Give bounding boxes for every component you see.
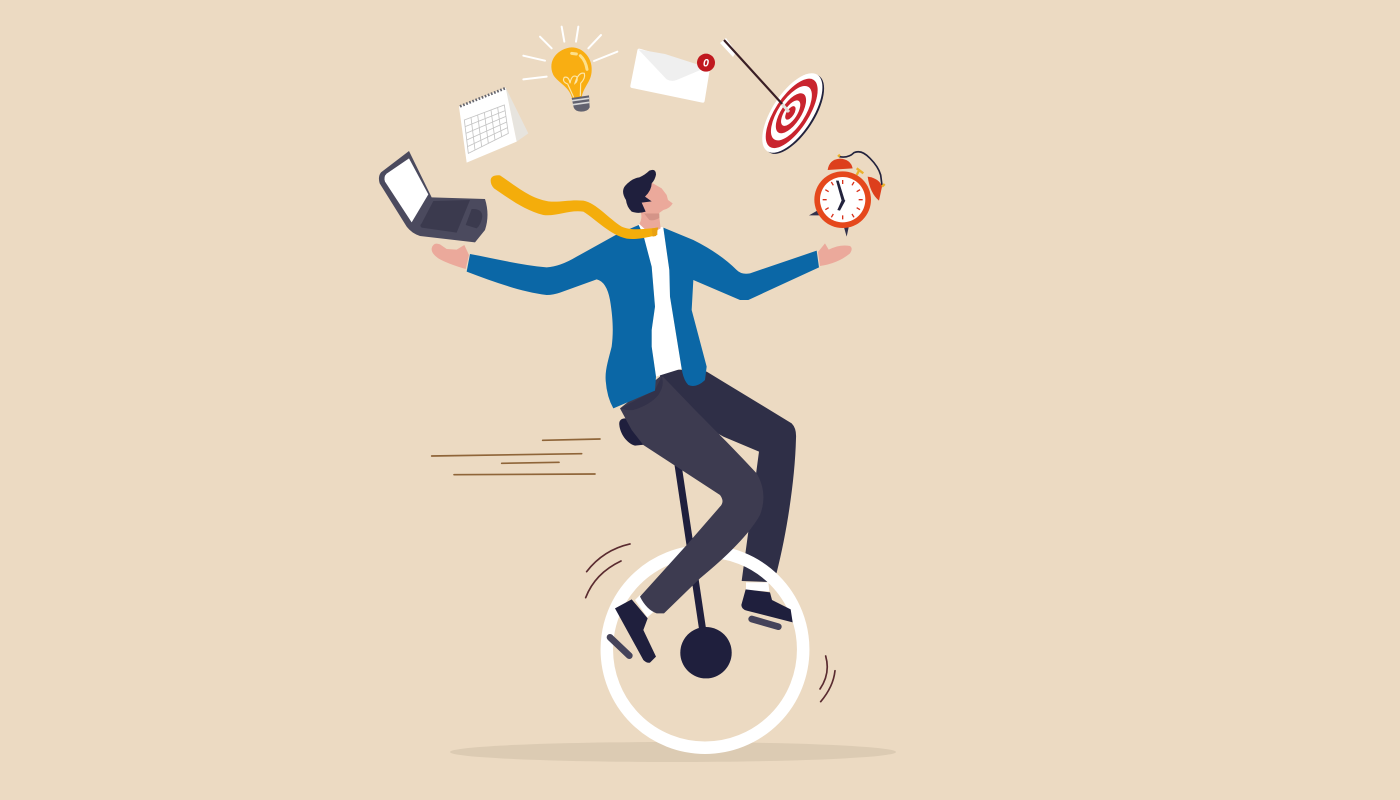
front foot	[610, 595, 656, 663]
notification badge: 0	[703, 58, 709, 70]
unicycle and rider	[432, 170, 852, 748]
arrow	[720, 38, 789, 112]
right hand	[818, 243, 852, 266]
bulb rays	[523, 27, 617, 79]
icon: alarm clock	[809, 152, 885, 237]
icon: laptop	[379, 151, 487, 242]
front leg	[620, 377, 763, 613]
wheel motion arcs	[586, 544, 835, 702]
back leg	[660, 368, 796, 582]
icon: target with arrow	[720, 38, 836, 163]
left hand	[432, 244, 469, 269]
seat	[619, 418, 657, 446]
icon: light bulb	[523, 27, 617, 112]
shirt	[639, 224, 682, 377]
ground shadow	[450, 742, 896, 762]
tie	[491, 175, 658, 239]
neck and face	[639, 183, 673, 234]
clock feet	[809, 210, 849, 237]
jacket	[467, 225, 819, 408]
bells	[828, 159, 853, 170]
wheel hub	[680, 627, 732, 678]
back foot	[741, 582, 793, 627]
motion lines behind rider	[432, 439, 600, 475]
trousers waist shading	[621, 377, 663, 410]
clock face	[814, 171, 871, 228]
wheel	[607, 551, 803, 748]
calendar grid	[464, 105, 508, 153]
hair	[623, 170, 656, 213]
icon: calendar	[459, 88, 528, 163]
seat post	[677, 458, 703, 632]
clock wire	[839, 152, 882, 185]
icon: envelope with badge	[632, 49, 715, 101]
